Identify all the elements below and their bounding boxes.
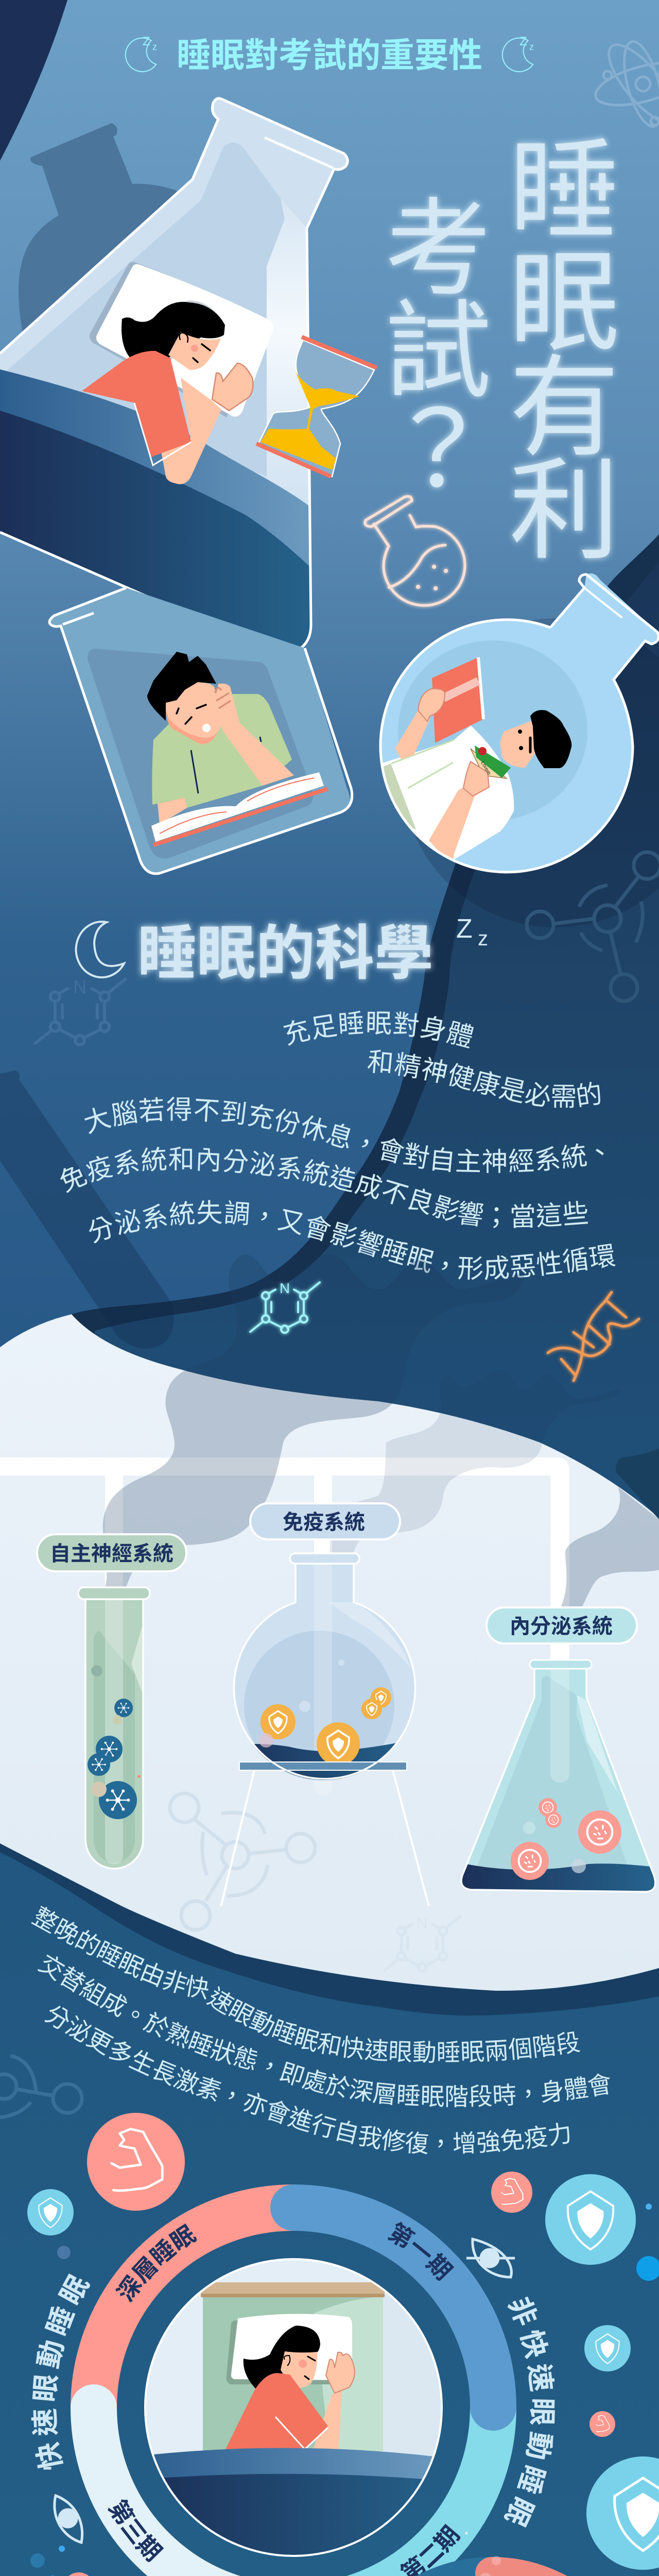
- scene: sleeper: [144, 2257, 445, 2566]
- pillow: [90, 262, 273, 417]
- hourglass: [256, 337, 377, 477]
- label: endocrine: [487, 1607, 637, 1643]
- smoke from test tube: [103, 1254, 525, 1587]
- pipe: [0, 1458, 569, 1662]
- page header: [126, 35, 534, 74]
- heading text: 睡眠的科學: [137, 921, 433, 987]
- shadow flask: [19, 123, 206, 412]
- blankets: [0, 369, 311, 670]
- book: [432, 657, 483, 743]
- line e: 分泌系統失調，又會影響睡眠，形成惡性循環: [89, 1200, 616, 1280]
- label: autonomic: [37, 1534, 186, 1571]
- stand legs: [221, 1770, 429, 1906]
- flask glass: [234, 1563, 415, 1779]
- icon: right moon: z: [529, 42, 534, 52]
- faint molecule: [527, 852, 659, 1001]
- cells: [88, 1665, 141, 1819]
- icon: orange DNA: [548, 1292, 639, 1381]
- heading: science of sleep: [76, 914, 488, 987]
- lower background: [0, 1803, 659, 2576]
- shield badges: [27, 2189, 74, 2235]
- tube outline: [85, 1599, 143, 1869]
- icon: eye left: [55, 2496, 82, 2543]
- icon: eye right: [466, 2239, 515, 2277]
- line a: 充足睡眠對身體: [283, 1011, 474, 1048]
- flask outline: [380, 574, 658, 872]
- liquid: [462, 1863, 655, 1891]
- outer label: REM: 快速眼動睡眠: [31, 2273, 90, 2470]
- line d: 免疫系統和內分泌系統造成不良影響；當這些: [60, 1147, 588, 1228]
- panel: autonomic system test tube: [37, 1534, 186, 1869]
- icon: cyan hex molecule: [250, 1280, 320, 1333]
- icon: faint hex molecule on white: [385, 1915, 460, 1971]
- dots: [646, 2204, 652, 2210]
- faint molecule left: [0, 2056, 82, 2117]
- flask outline: [0, 98, 348, 654]
- immune cells: [259, 1659, 391, 1766]
- stand plate: [239, 1762, 407, 1770]
- tube glass: [85, 1599, 143, 1869]
- shirt: [383, 725, 514, 859]
- head: [500, 721, 538, 768]
- title: 睡眠對考試的重要性: [177, 36, 482, 74]
- icons: floating badges: [27, 2113, 659, 2576]
- navy corner curve: [0, 0, 67, 161]
- label: endocrine: 內分泌系統: [510, 1615, 613, 1638]
- label: autonomic: 自主神經系統: [50, 1543, 174, 1565]
- text: sleep stages paragraph: [31, 1906, 610, 2155]
- jar inner: [88, 649, 313, 859]
- dark corner blob: [616, 1448, 659, 1519]
- zz: Z: [456, 914, 473, 944]
- ring label: deep sleep: 深層睡眠: [115, 2224, 197, 2302]
- icon: left moon: z: [152, 42, 157, 52]
- segment: stage 3: [94, 2408, 293, 2576]
- white lab panel: [0, 1314, 659, 1991]
- jar outline: [49, 588, 352, 874]
- icon: glowing flask: [365, 497, 465, 605]
- segment: stage 1: [293, 2208, 493, 2408]
- icon: left moon: [126, 35, 157, 72]
- arm badges: [87, 2113, 185, 2211]
- icon: faint hex molecule: N: [73, 976, 86, 997]
- icon: crescent moon: [76, 922, 124, 977]
- icon: right moon: Z: [519, 35, 527, 48]
- dark wave band: [0, 1752, 659, 2015]
- flask outline: [234, 1563, 415, 1779]
- outer label: NREM: 非快速眼動睡眠: [504, 2297, 555, 2528]
- panel: round flask with student reading: [380, 573, 658, 876]
- icon: left moon: Z: [143, 35, 150, 48]
- liquid: [252, 1743, 395, 1780]
- panel: jar with sleepy student: [49, 588, 352, 874]
- jar glass: [50, 588, 350, 873]
- wrapper label: Lorem: [479, 760, 492, 776]
- flask highlight: [267, 198, 309, 515]
- icon: cyan hex molecule: N: [280, 1280, 290, 1296]
- chart: sleep cycle ring: [31, 2187, 555, 2576]
- smoke from round flask: [330, 1370, 622, 1553]
- arms: [395, 710, 430, 759]
- icon: faint hex molecule on white: N: [417, 1915, 428, 1932]
- text: intro paragraph: [60, 1011, 616, 1280]
- flask glass: [461, 1669, 655, 1892]
- segment: stage 2: [293, 2408, 493, 2576]
- zz small: z: [478, 927, 488, 950]
- girl: [82, 300, 253, 484]
- line b: 和精神健康是必需的: [368, 1049, 600, 1108]
- title line 2: 考試？: [385, 190, 491, 510]
- ring value: [349, 2573, 634, 2576]
- icon: right moon: [502, 35, 534, 72]
- flask outline: [461, 1669, 655, 1892]
- line 3: 分泌更多生長激素，亦會進行自我修復，增強免疫力: [44, 2005, 569, 2155]
- dark backdrop band: [72, 534, 659, 1546]
- ring track: [349, 2573, 634, 2576]
- icon: faint hex molecule: [35, 976, 125, 1045]
- flask inner shade: [0, 143, 286, 477]
- title line 1: 睡眠有利: [509, 130, 619, 573]
- line c: 大腦若得不到充份休息，會對自主神經系統、: [84, 1096, 604, 1173]
- flask glass: [0, 98, 348, 654]
- ring label: stage 1: 第一期: [388, 2222, 454, 2281]
- flask shadow circle: [402, 618, 659, 927]
- open book: [151, 772, 324, 842]
- faint molecule on white: [170, 1793, 315, 1930]
- smoke from conical flask: [561, 1487, 659, 1606]
- panel: immune system flask: [221, 1503, 429, 1906]
- label: immune: 免疫系統: [283, 1511, 365, 1534]
- icon: faint atom: [591, 35, 659, 133]
- sandwich: [471, 749, 507, 778]
- line 2: 交替組成。於熟睡狀態，即處於深層睡眠階段時，身體會: [38, 1955, 610, 2107]
- dark backdrop panel: [95, 562, 659, 1546]
- segment: deep sleep: [94, 2208, 293, 2408]
- ring label: stage 3: 第三期: [108, 2499, 164, 2562]
- line 1: 整晚的睡眠由非快速眼動睡眠和快速眼動睡眠兩個階段: [31, 1906, 580, 2063]
- chart: hours of sleep ring: [416, 2556, 567, 2576]
- test tube shadow: [0, 1071, 174, 1349]
- panel: endocrine system flask: [458, 1607, 659, 1896]
- student: [147, 652, 328, 845]
- panel: large flask with sleeping girl: [0, 98, 377, 670]
- background upper section: [0, 0, 659, 1546]
- label: immune: [250, 1503, 400, 1539]
- big title: [385, 130, 619, 573]
- endocrine cells: [511, 1798, 621, 1880]
